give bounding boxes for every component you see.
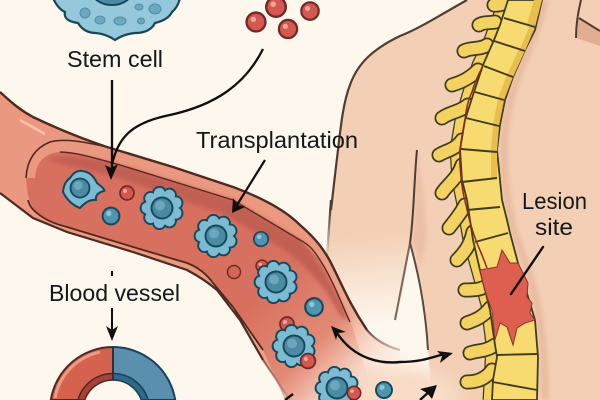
- blood vessel: [0, 92, 400, 400]
- lesion: [480, 250, 535, 345]
- blood vessel cross-section: [51, 347, 175, 400]
- nerve cord: [456, 0, 505, 400]
- spinal cord red line: [460, 66, 487, 268]
- label: transplantation: Transplantation: [196, 127, 358, 153]
- vertebrae: [460, 0, 542, 400]
- cells in vessel: [63, 171, 392, 400]
- arrow: stem cell to vessel: [105, 49, 263, 180]
- arrow: lesion pointer: [511, 247, 543, 294]
- label: blood vessel: Blood vessel: [49, 280, 180, 306]
- label: lesion site: Lesion: [522, 188, 587, 214]
- spine with nerve roots: [439, 0, 542, 400]
- label: stem cell: Stem cell: [67, 46, 163, 72]
- vertebra dividers: [461, 18, 537, 390]
- double-headed curved arrow: [331, 326, 453, 363]
- human torso: [327, 0, 600, 400]
- label: lesion site: [522, 188, 587, 240]
- large stem cell: [53, 0, 180, 40]
- arrow fragment bottom: [285, 394, 293, 400]
- arrow: transplantation: [232, 160, 265, 213]
- red blood cells top: [247, 0, 319, 38]
- arrow to spine: [420, 385, 437, 400]
- arrow: blood vessel: [106, 271, 118, 341]
- label: lesion site: site: [535, 214, 573, 240]
- lumen: [26, 152, 375, 400]
- nerve roots: [439, 3, 505, 382]
